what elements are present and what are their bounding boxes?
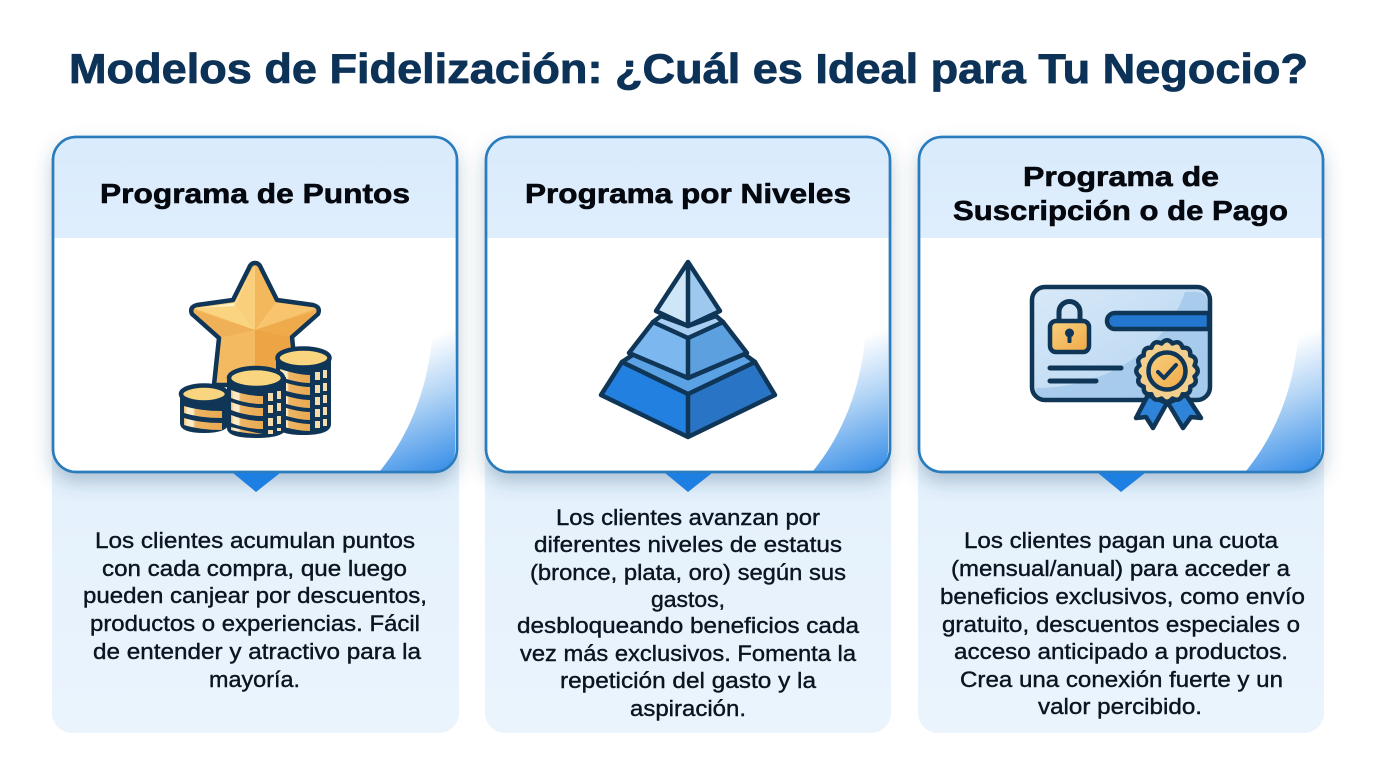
description: [83, 528, 427, 692]
description: desbloqueando beneficios cada: [517, 613, 860, 638]
top card: [919, 137, 1323, 472]
heading: [953, 161, 1288, 226]
icon: star and coins: [181, 263, 330, 437]
coin stack: left: [181, 386, 228, 432]
coin stack: middle: [228, 368, 285, 437]
description background: [485, 440, 891, 733]
top card: [53, 137, 457, 472]
panel: programa de suscripción o de pago: [918, 137, 1324, 733]
description: vez más exclusivos. Fomenta la: [520, 641, 857, 666]
description: (mensual/anual) para acceder a: [951, 556, 1291, 581]
description: pueden canjear por descuentos,: [83, 583, 427, 608]
icon: membership card with lock and seal: [1032, 287, 1210, 428]
description: acceso anticipado a productos.: [954, 639, 1288, 664]
description: (bronce, plata, oro) según sus: [530, 560, 846, 585]
description: productos o experiencias. Fácil: [90, 611, 420, 636]
top card: [486, 137, 890, 472]
description: gastos,: [651, 587, 725, 612]
lock: [1050, 302, 1089, 352]
description: Los clientes pagan una cuota: [964, 528, 1279, 553]
description: valor percibido.: [1038, 694, 1202, 719]
description: [940, 528, 1305, 719]
description: Los clientes avanzan por: [556, 505, 820, 530]
card stripe: [1107, 313, 1209, 329]
pointer: [665, 473, 712, 492]
description: Los clientes acumulan puntos: [95, 528, 415, 553]
pointer: [1098, 473, 1145, 492]
heading: Programa de Puntos: [100, 178, 410, 209]
description: repetición del gasto y la: [560, 668, 817, 693]
panel: programa de puntos: [52, 137, 459, 733]
description: Crea una conexión fuerte y un: [960, 667, 1283, 692]
description: [517, 505, 860, 721]
description: de entender y atractivo para la: [93, 639, 422, 664]
heading: Programa de: [1023, 161, 1219, 192]
description: con cada compra, que luego: [102, 556, 407, 581]
title: Modelos de Fidelización: ¿Cuál es Ideal para Tu Negocio?: [69, 45, 1308, 92]
icon: pyramid: [601, 262, 775, 437]
description: aspiración.: [630, 696, 746, 721]
heading: Suscripción o de Pago: [953, 195, 1288, 226]
pointer: [233, 473, 280, 492]
description: beneficios exclusivos, como envío: [940, 584, 1305, 609]
description: gratuito, descuentos especiales o: [942, 612, 1300, 637]
description: mayoría.: [209, 667, 300, 692]
panel: programa por niveles: [485, 137, 891, 733]
description background: [918, 440, 1324, 733]
seal: [1136, 340, 1198, 402]
coin stack: right: [277, 348, 330, 434]
description: diferentes niveles de estatus: [534, 532, 842, 557]
description background: [52, 440, 459, 733]
ribbons: [1136, 395, 1167, 428]
card lines: [1050, 368, 1121, 381]
heading: Programa por Niveles: [525, 178, 851, 209]
